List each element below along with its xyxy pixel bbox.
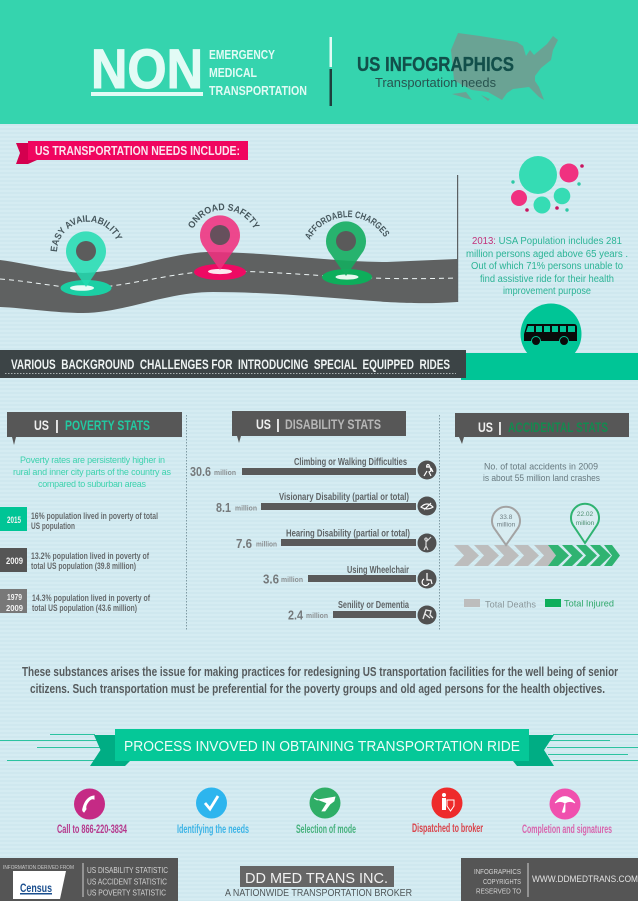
row: hearing disability: million — [256, 542, 277, 548]
subheading: transportation needs: Transportation needs — [375, 76, 496, 90]
icon: check mark — [205, 796, 218, 809]
row: senility or dementia — [288, 599, 436, 624]
step: call: Call to 866-220-3834 — [57, 822, 127, 836]
footer: copyrights — [461, 858, 638, 901]
text block: 2013 population: Out of which 71% persons unable to — [471, 261, 623, 272]
step: selection — [296, 788, 356, 836]
heading: poverty stats — [7, 412, 182, 445]
list: statistics sources: US ACCIDENT STATISTIC — [87, 876, 167, 886]
row: climbing or walking: Climbing or Walking Difficulties — [294, 456, 407, 468]
pin: total injured value: million — [576, 520, 595, 527]
banner: various background challenges: VARIOUS BACKGROUND CHALLENGES FOR INTRODUCING SPECIAL EQUIPPED RIDES — [11, 356, 450, 372]
text block: total accidents: No. of total accidents in 2009 — [484, 462, 598, 472]
pin: affordable charges — [305, 210, 390, 285]
row: senility or dementia: Senility or Dementia — [338, 599, 409, 611]
step: call — [57, 788, 127, 836]
icon: bus — [524, 324, 577, 346]
panel: disability stats — [190, 411, 436, 624]
row: visionary disability: Visionary Disability (partial or total) — [279, 491, 409, 503]
heading: disability stats: | — [276, 416, 280, 432]
footer: sources: INFORMATION DERIVED FROM — [3, 865, 74, 871]
heading: poverty stats: | — [55, 417, 59, 433]
row: hearing disability: 7.6 — [236, 536, 252, 551]
label: onroad safety: ONROAD SAFETY — [188, 204, 260, 228]
icon: umbrella — [555, 796, 575, 812]
banner: various background challenges — [0, 350, 466, 378]
stat: 2015: US population — [31, 521, 75, 532]
pin: total deaths value — [492, 507, 520, 545]
footer: company name: DD MED TRANS INC. — [245, 870, 388, 887]
legend: total deaths — [464, 599, 536, 610]
row: climbing or walking: million — [214, 470, 236, 477]
stat: 2015: 16% population lived in poverty of total — [31, 511, 158, 522]
text block: total accidents — [483, 462, 600, 484]
legend: total deaths: Total Deaths — [485, 600, 536, 610]
legend: total injured: Total Injured — [564, 598, 614, 610]
text block: 2013 population: improvement purpose — [503, 286, 591, 297]
footer: copyrights: INFOGRAPHICS — [474, 869, 521, 876]
row: using wheelchair — [263, 564, 436, 588]
pin: total injured value: 22.02 — [577, 511, 594, 518]
stat: 2015 — [0, 507, 158, 532]
header band — [0, 0, 638, 124]
step: identifying — [177, 788, 249, 836]
row: hearing disability — [236, 528, 436, 552]
stat: 1979 to 2009: 14.3% population lived in poverty of — [32, 593, 151, 604]
heading: disability stats: DISABILITY STATS — [285, 416, 381, 432]
icon: phone — [83, 796, 94, 812]
step: selection: Selection of mode — [296, 822, 356, 836]
header divider — [330, 37, 332, 106]
icon: US map — [451, 33, 558, 101]
pin: total deaths value: 33.8 — [500, 514, 513, 521]
title: emergency medical transportation: TRANSPORTATION — [209, 83, 307, 98]
ribbon: US transportation needs include: US TRANSPORTATION NEEDS INCLUDE: — [35, 144, 240, 158]
stat: 1979 to 2009: 2009 — [6, 603, 23, 613]
list: statistics sources: US POVERTY STATISTIC — [87, 888, 166, 898]
footer: copyrights: RESERVED TO — [476, 888, 522, 896]
step: identifying: Identifying the needs — [177, 822, 249, 836]
road illustration — [0, 252, 457, 313]
pin: total deaths value: million — [497, 522, 516, 528]
heading: accidental stats — [455, 413, 629, 444]
row: visionary disability — [216, 491, 436, 516]
icon: airplane — [314, 797, 335, 811]
heading: disability stats — [232, 411, 406, 443]
stat: 1979 to 2009: total US population (43.6 million) — [32, 603, 137, 614]
stat: 1979 to 2009: 1979 — [7, 592, 22, 602]
pin: easy availability — [50, 215, 122, 296]
heading: accidental stats: | — [498, 419, 502, 435]
row: climbing or walking — [190, 456, 436, 480]
title: emergency medical transportation: MEDICAL — [209, 65, 257, 80]
paragraph: conclusion — [22, 665, 618, 696]
footer: company name: A NATIONWIDE TRANSPORTATION BROKER — [225, 888, 412, 899]
panel: poverty stats — [0, 412, 182, 614]
stat: 2009: total US population (39.8 million) — [31, 561, 136, 572]
stat: 2009: 2009 — [6, 556, 23, 566]
label: affordable charges: AFFORDABLE CHARGES — [305, 210, 390, 240]
stat: 2015: 2015 — [7, 515, 21, 525]
text block: total accidents: is about 55 million land crashes — [483, 473, 600, 484]
step: completion — [522, 788, 612, 836]
text block: poverty rates — [13, 455, 172, 489]
icon: person with shield — [442, 793, 454, 811]
text block: 2013 population: find assistive ride for their health — [480, 274, 614, 285]
heading: poverty stats: POVERTY STATS — [65, 417, 150, 433]
icon: person with raised arm — [424, 537, 431, 550]
row: senility or dementia: 2.4 — [288, 608, 304, 622]
step: dispatched: Dispatched to broker — [412, 821, 483, 835]
heading: US infographics: US INFOGRAPHICS — [357, 54, 514, 76]
icon: crossed eye — [421, 503, 433, 510]
row: using wheelchair: million — [281, 577, 303, 584]
ribbon: US transportation needs include — [16, 141, 248, 164]
logo: census — [13, 871, 66, 899]
pin: onroad safety — [188, 204, 260, 280]
heading: poverty stats: US — [34, 417, 49, 433]
chevron arrows: deaths and injured — [454, 545, 620, 566]
icon: head scribble — [423, 610, 433, 619]
row: climbing or walking: 30.6 — [190, 464, 211, 479]
title: NON: NON — [91, 37, 203, 100]
icon: wheelchair — [422, 573, 432, 586]
heading: disability stats: US — [256, 416, 271, 432]
row: using wheelchair: 3.6 — [263, 572, 279, 586]
footer: copyrights: COPYRIGHTS — [483, 879, 521, 886]
step: dispatched — [412, 788, 483, 835]
pin: total injured value — [571, 504, 599, 543]
stat: 2009: 13.2% population lived in poverty of — [31, 551, 150, 562]
icon: walking person — [424, 464, 433, 476]
row: visionary disability: million — [235, 506, 257, 512]
list: statistics sources — [87, 865, 168, 898]
stat: 2009 — [0, 548, 150, 572]
bus callout — [461, 304, 638, 380]
title: emergency medical transportation — [209, 47, 307, 98]
footer: company name — [225, 866, 412, 899]
row: visionary disability: 8.1 — [216, 500, 231, 515]
text block: 2013 population: 2013: USA Population includes 281 — [472, 236, 622, 247]
text block: poverty rates: compared to suburban areas — [38, 479, 146, 489]
panel: accidental stats — [454, 413, 629, 610]
row: using wheelchair: Using Wheelchair — [347, 564, 409, 576]
list: statistics sources: US DISABILITY STATISTIC — [87, 865, 168, 875]
bubbles decoration — [511, 156, 584, 214]
row: hearing disability: Hearing Disability (partial or total) — [286, 528, 410, 540]
row: senility or dementia: million — [306, 613, 328, 620]
ribbon: process involved: PROCESS INVOVED IN OBTAINING TRANSPORTATION RIDE — [124, 738, 520, 755]
heading: accidental stats: US — [478, 419, 493, 435]
stat: 1979 to 2009 — [0, 589, 151, 614]
text block: 2013 population: million persons aged above 65 years . — [466, 249, 628, 260]
logo: census: Census — [20, 881, 52, 895]
label: easy availability: EASY AVAILABILITY — [50, 215, 122, 252]
ribbon: process involved — [0, 729, 638, 766]
text block: poverty rates: Poverty rates are persistently higher in — [20, 455, 165, 465]
text block: poverty rates: rural and inner city parts of the country as — [13, 467, 172, 477]
footer: sources — [0, 858, 178, 901]
text block: 2013 population — [466, 236, 628, 297]
title: emergency medical transportation: EMERGENCY — [209, 47, 275, 62]
